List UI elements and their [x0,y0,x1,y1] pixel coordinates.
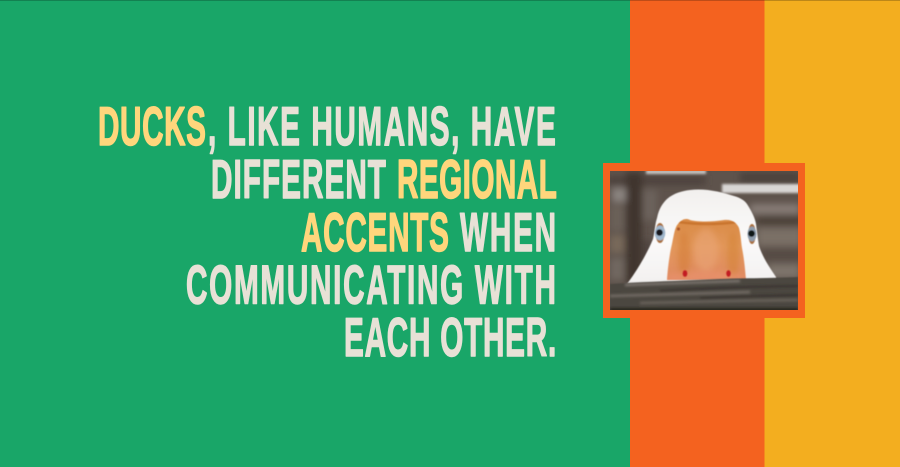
right eye [748,224,756,244]
yellow stripe [764,0,900,467]
green background panel [0,0,630,467]
headline text: DIFFERENT [211,149,386,210]
left nostril [683,270,687,277]
headline text: COMMUNICATING WITH [186,255,556,316]
photo: duck peeking over a log [606,170,802,311]
headline text: , LIKE HUMANS, HAVE [208,96,556,157]
bill [665,219,746,285]
orange stripe [630,0,764,467]
right nostril [726,270,731,277]
headline text: REGIONAL [397,149,557,210]
headline text [98,96,557,368]
duck head [627,189,776,290]
headline text: EACH OTHER. [344,307,556,368]
log [610,277,798,311]
headline text: DUCKS [98,96,206,157]
headline text: ACCENTS [301,202,449,263]
left eye [655,223,665,243]
headline text: WHEN [460,202,556,263]
photo frame [603,163,805,318]
